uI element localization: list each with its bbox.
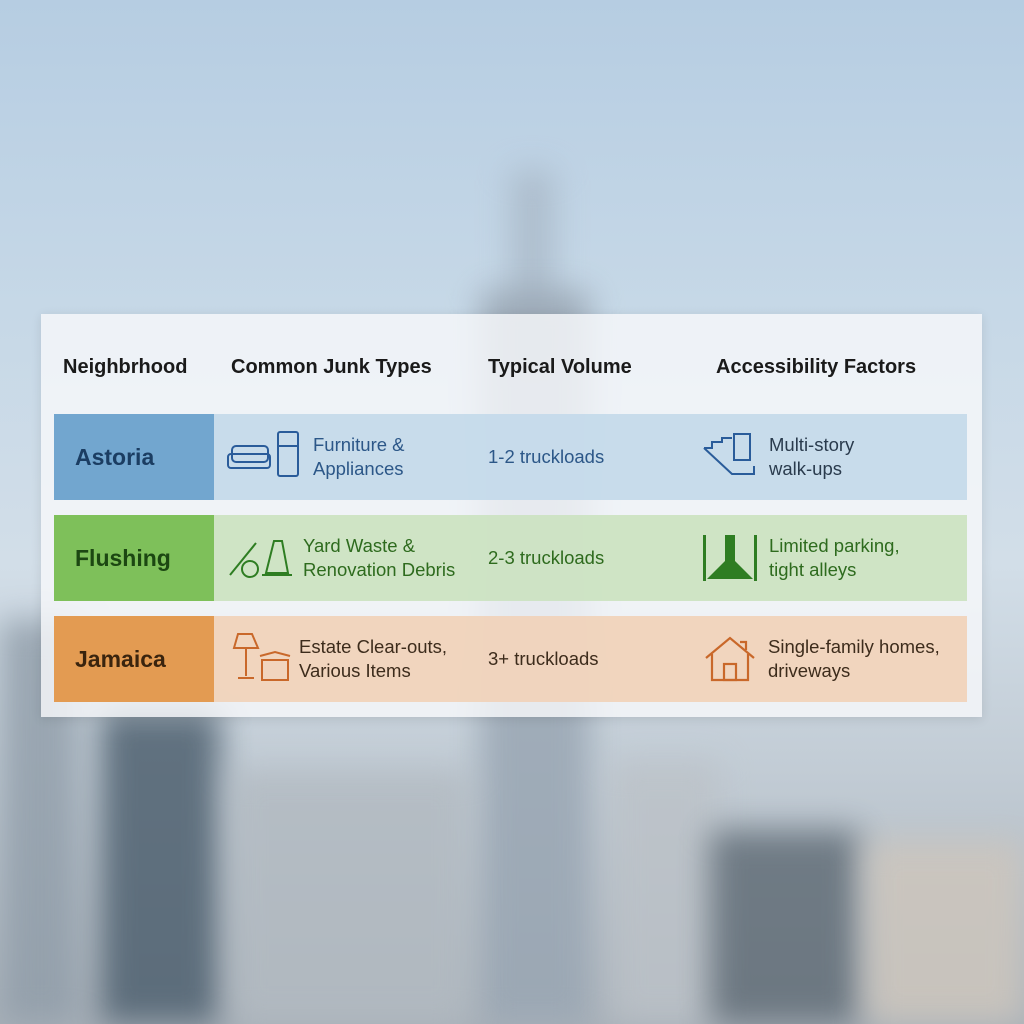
name cell Flushing: [54, 515, 214, 601]
icon: house: [705, 636, 755, 682]
text: Multi-story walk-ups: walk-ups: [769, 458, 842, 479]
text: Multi-story walk-ups: [769, 434, 854, 479]
text: Yard Waste & Renovation Debris: [303, 535, 455, 580]
icon: road: [703, 535, 757, 581]
icon: lamp and box: [232, 633, 290, 681]
header: Neighborhood: Neighbrhood: [63, 356, 187, 378]
text: Limited parking, tight alleys: [769, 535, 900, 580]
text: Single-family homes, driveways: Single-family homes,: [768, 636, 940, 657]
icon: leaves and cone: [229, 540, 292, 578]
text: Limited parking, tight alleys: tight alleys: [769, 559, 856, 580]
text: 3+ truckloads: 3+ truckloads: [488, 648, 599, 669]
text: Furniture & Appliances: Appliances: [313, 458, 404, 479]
header: Accessibility Factors: Accessibility Factors: [716, 356, 916, 378]
text: 2-3 truckloads: 2-3 truckloads: [488, 547, 604, 568]
text: Estate Clear-outs, Various Items: Estate Clear-outs,: [299, 636, 447, 657]
icon: stairs building: [703, 433, 755, 475]
text: Multi-story walk-ups: Multi-story: [769, 434, 854, 455]
row: Flushing: [54, 515, 967, 601]
name cell Flushing: Flushing: [75, 545, 171, 571]
header: Typical Volume: Typical Volume: [488, 356, 632, 378]
text: Estate Clear-outs, Various Items: Various Items: [299, 660, 411, 681]
row: Astoria: [54, 414, 967, 500]
text: Single-family homes, driveways: [768, 636, 940, 681]
text: Estate Clear-outs, Various Items: [299, 636, 447, 681]
text: Limited parking, tight alleys: Limited parking,: [769, 535, 900, 556]
text: Furniture & Appliances: [313, 434, 405, 479]
text: Furniture & Appliances: Furniture &: [313, 434, 405, 455]
panel: table: [41, 314, 982, 717]
row: Jamaica: [54, 616, 967, 702]
text: Yard Waste & Renovation Debris: Renovation Debris: [303, 559, 455, 580]
text: 1-2 truckloads: 1-2 truckloads: [488, 446, 604, 467]
name cell Astoria: [54, 414, 214, 500]
name cell Jamaica: [54, 616, 214, 702]
name cell Jamaica: Jamaica: [75, 646, 166, 672]
icon: sofa and fridge: [227, 431, 299, 477]
name cell Astoria: Astoria: [75, 444, 154, 470]
header: Common Junk Types: Common Junk Types: [231, 356, 432, 378]
text: Single-family homes, driveways: driveways: [768, 660, 850, 681]
text: Yard Waste & Renovation Debris: Yard Waste &: [303, 535, 415, 556]
